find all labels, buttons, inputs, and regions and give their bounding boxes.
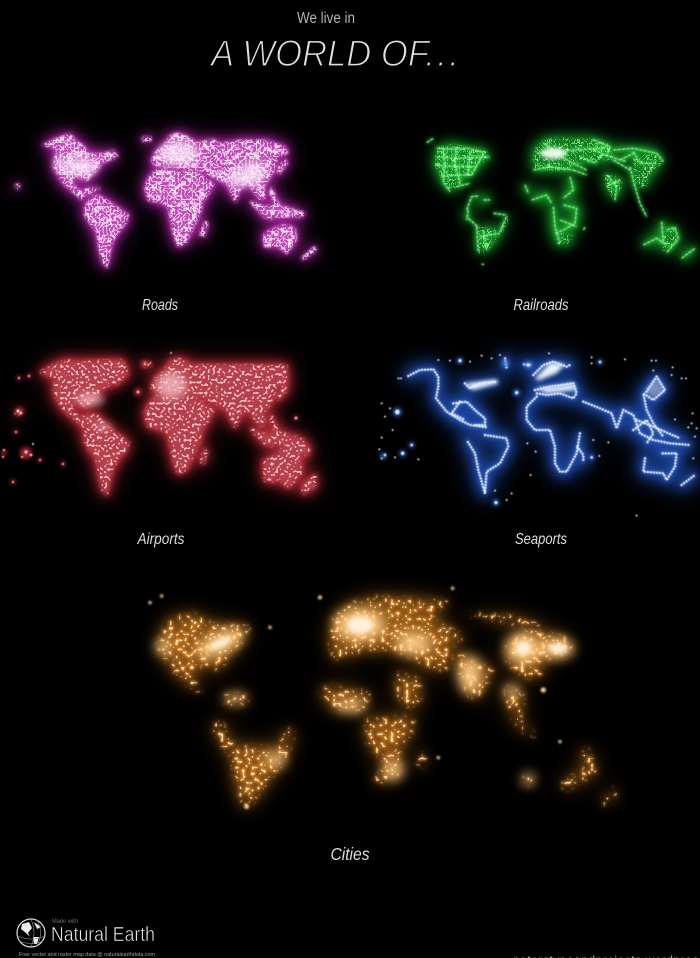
text: Natural Earth: Natural Earth bbox=[51, 924, 155, 946]
isolated city dots bbox=[148, 587, 562, 809]
white-hot cores bbox=[208, 616, 568, 655]
label: Roads: Roads bbox=[142, 297, 178, 314]
map panel: Roads bbox=[16, 133, 316, 267]
label: Airports: Airports bbox=[137, 531, 184, 548]
ocean airports bbox=[1, 352, 298, 484]
hot spots: dense city clusters bbox=[157, 609, 573, 785]
map panel: Seaports bbox=[378, 352, 698, 517]
label: Cities: Cities bbox=[330, 844, 370, 864]
label: Seaports: Seaports bbox=[515, 531, 567, 548]
text: Made with: Made with bbox=[52, 918, 78, 925]
label: Railroads: Railroads bbox=[514, 297, 568, 314]
title: A WORLD OF...: ... bbox=[425, 33, 459, 74]
logo: Natural Earth bbox=[17, 918, 155, 958]
title: A WORLD OF...: A WORLD OF bbox=[209, 33, 431, 74]
map panel: Cities bbox=[148, 587, 617, 810]
text: Free vector and raster map data: Free vector and raster map data @ naturalearthdata.com bbox=[19, 952, 155, 958]
subtitle: We live in: We live in bbox=[297, 10, 355, 27]
island ports bbox=[378, 352, 698, 517]
map panel: Airports bbox=[1, 352, 317, 495]
icon: globe bbox=[17, 919, 45, 947]
map panel: Railroads bbox=[427, 138, 695, 264]
